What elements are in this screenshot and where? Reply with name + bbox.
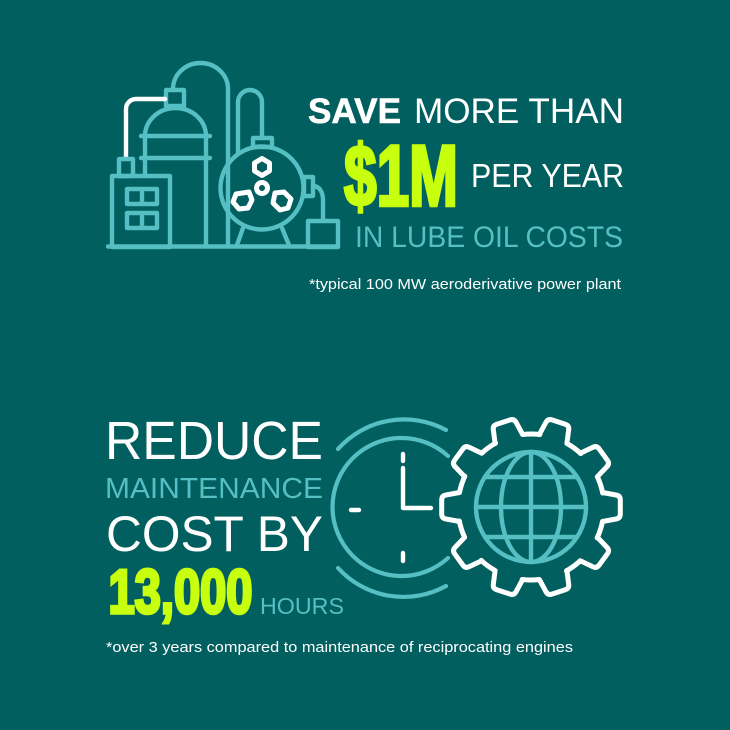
text: hours: HOURS	[260, 593, 344, 619]
footnote: reciprocating engines: *over 3 years compared to maintenance of reciprocating engines	[106, 640, 573, 656]
heading: save more than: MORE THAN	[414, 92, 624, 131]
heading: save more than	[308, 92, 624, 131]
panel: maintenance reduction	[105, 411, 621, 656]
icon: clock	[333, 419, 448, 597]
icon: gear	[441, 413, 621, 601]
footnote: power plant: *typical 100 MW aeroderivative power plant	[309, 277, 621, 293]
big number: $1M: $1M	[344, 128, 458, 224]
text: in lube oil costs: IN LUBE OIL COSTS	[355, 221, 623, 254]
heading: reduce: REDUCE	[105, 411, 323, 471]
heading: cost by: COST BY	[106, 506, 323, 562]
text: maintenance: MAINTENANCE	[105, 473, 323, 505]
panel: lube oil savings	[108, 63, 624, 293]
icon: turbine rings	[233, 158, 291, 210]
heading: save more than: SAVE	[308, 92, 401, 131]
icon: globe	[476, 452, 586, 562]
text: per year: PER YEAR	[471, 157, 624, 194]
big number: 13,000: 13,000	[108, 558, 252, 627]
icon: power plant	[108, 63, 338, 247]
